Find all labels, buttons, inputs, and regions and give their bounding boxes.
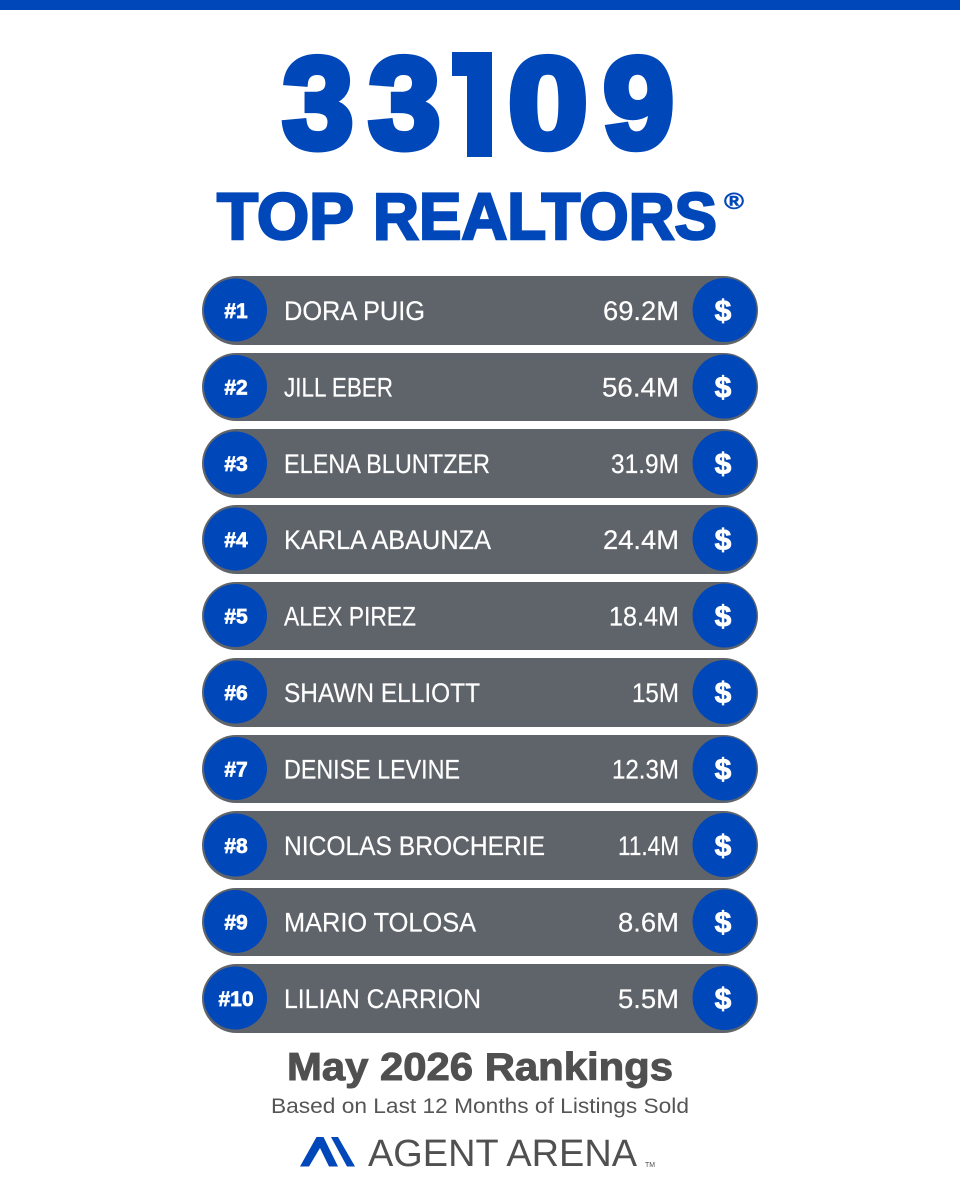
row 8: Nicolas Brocherie: NICOLAS BROCHERIE bbox=[284, 831, 545, 861]
row 6: Shawn Elliott bbox=[202, 658, 758, 727]
row 2: Jill Eber: $ bbox=[715, 372, 732, 404]
row 7: Denise Levine: #7 bbox=[224, 758, 248, 782]
row 7: Denise Levine: 12.3M bbox=[612, 754, 679, 784]
row 9: Mario Tolosa: $ bbox=[715, 906, 732, 940]
heading: top realtors bbox=[217, 179, 744, 253]
row 4: Karla Abaunza: 24.4M bbox=[603, 525, 679, 555]
row 1: Dora Puig: #1 bbox=[224, 300, 248, 323]
heading: top realtors: ® bbox=[724, 188, 744, 214]
row 2: Jill Eber: JILL EBER bbox=[284, 372, 393, 402]
row 4: Karla Abaunza: $ bbox=[715, 524, 732, 557]
row 10: Lilian Carrion: LILIAN CARRION bbox=[284, 984, 481, 1014]
row 10: Lilian Carrion: $ bbox=[715, 983, 732, 1016]
row 7: Denise Levine: $ bbox=[715, 754, 732, 786]
logo: Agent Arena: AGENT ARENA bbox=[368, 1133, 638, 1175]
footer note: Based on Last 12 Months of Listings Sold bbox=[271, 1095, 689, 1118]
row 4: Karla Abaunza: #4 bbox=[224, 529, 248, 552]
row 3: Elena Bluntzer: $ bbox=[715, 448, 732, 481]
row 6: Shawn Elliott: $ bbox=[715, 677, 732, 710]
row 1: Dora Puig: DORA PUIG bbox=[284, 296, 425, 326]
row 6: Shawn Elliott: #6 bbox=[224, 682, 248, 705]
row 1: Dora Puig: 69.2M bbox=[603, 296, 679, 326]
row 8: Nicolas Brocherie: #8 bbox=[224, 835, 248, 858]
row 7: Denise Levine: DENISE LEVINE bbox=[284, 754, 460, 784]
title: zip code bbox=[282, 52, 673, 157]
row 2: Jill Eber bbox=[202, 353, 758, 421]
logo: Agent Arena: TM bbox=[645, 1162, 655, 1169]
row 1: Dora Puig bbox=[202, 276, 758, 345]
ranking list bbox=[202, 276, 758, 1033]
row 6: Shawn Elliott: SHAWN ELLIOTT bbox=[284, 678, 480, 708]
row 8: Nicolas Brocherie: 11.4M bbox=[618, 831, 679, 861]
row 8: Nicolas Brocherie: $ bbox=[715, 830, 732, 863]
row 3: Elena Bluntzer bbox=[202, 429, 758, 498]
row 5: Alex Pirez: #5 bbox=[224, 606, 248, 628]
title: zip code: 9 bbox=[603, 32, 674, 176]
row 3: Elena Bluntzer: ELENA BLUNTZER bbox=[284, 449, 490, 479]
row 1: Dora Puig: $ bbox=[715, 295, 732, 328]
row 9: Mario Tolosa: 8.6M bbox=[618, 908, 679, 938]
row 7: Denise Levine bbox=[202, 735, 758, 803]
row 2: Jill Eber: #2 bbox=[224, 376, 248, 400]
row 10: Lilian Carrion: #10 bbox=[218, 988, 254, 1011]
row 4: Karla Abaunza bbox=[202, 505, 758, 574]
row 3: Elena Bluntzer: #3 bbox=[224, 453, 248, 476]
row 10: Lilian Carrion bbox=[202, 964, 758, 1033]
top accent bar bbox=[0, 0, 960, 10]
heading: top realtors: REALTORS bbox=[373, 179, 717, 253]
heading: top realtors: TOP bbox=[217, 179, 354, 253]
row 5: Alex Pirez: $ bbox=[715, 600, 732, 634]
title: zip code: 1 bbox=[438, 32, 516, 176]
title: zip code: 0 bbox=[508, 32, 588, 176]
row 3: Elena Bluntzer: 31.9M bbox=[611, 449, 679, 479]
row 9: Mario Tolosa bbox=[202, 888, 758, 956]
row 8: Nicolas Brocherie bbox=[202, 811, 758, 880]
row 5: Alex Pirez: ALEX PIREZ bbox=[284, 602, 416, 632]
row 5: Alex Pirez bbox=[202, 582, 758, 650]
footer heading: rankings date: May 2026 Rankings bbox=[287, 1046, 673, 1089]
row 10: Lilian Carrion: 5.5M bbox=[618, 984, 679, 1014]
row 6: Shawn Elliott: 15M bbox=[632, 678, 679, 708]
row 2: Jill Eber: 56.4M bbox=[602, 372, 679, 402]
row 9: Mario Tolosa: #9 bbox=[224, 912, 248, 934]
title: zip code: 3 bbox=[282, 32, 354, 176]
row 4: Karla Abaunza: KARLA ABAUNZA bbox=[284, 525, 491, 555]
icon: logo chevrons bbox=[300, 1137, 355, 1166]
row 5: Alex Pirez: 18.4M bbox=[609, 602, 679, 632]
title: zip code: 3 bbox=[368, 32, 440, 176]
row 9: Mario Tolosa: MARIO TOLOSA bbox=[284, 908, 476, 938]
